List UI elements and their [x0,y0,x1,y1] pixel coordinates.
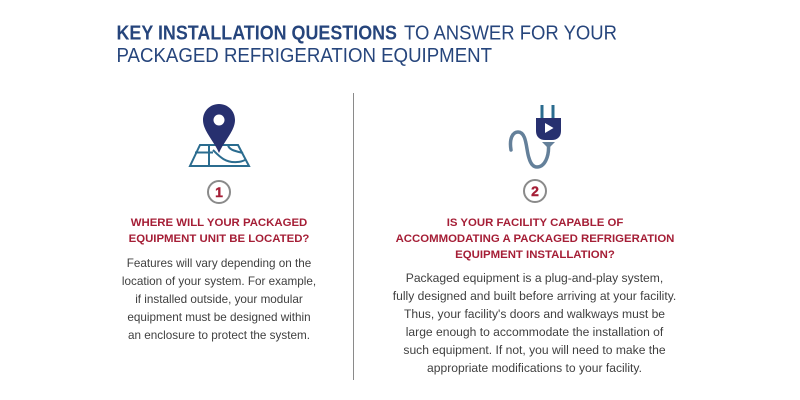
question 2 text: fully designed and built before arriving at your facility. [393,289,676,303]
question 1 text [122,257,316,342]
question 1 text: an enclosure to protect the system. [128,329,310,342]
question 1 heading: EQUIPMENT UNIT BE LOCATED? [129,233,309,245]
title: PACKAGED REFRIGERATION EQUIPMENT [116,45,492,67]
question 2 heading [396,217,674,261]
title [116,22,617,67]
question 1 text: equipment must be designed within [127,311,311,324]
question 2 text [392,271,676,375]
question 2 heading: EQUIPMENT INSTALLATION? [455,249,615,261]
number badge 1: 1 [215,184,223,200]
question 2 text: large enough to accommodate the installation of [406,325,663,339]
question 1 heading: WHERE WILL YOUR PACKAGED [131,217,307,229]
icon: map pin [188,104,251,167]
question 2 text: Packaged equipment is a plug-and-play system, [406,271,663,285]
question 1 text: Features will vary depending on the [127,257,311,270]
question 1 text: if installed outside, your modular [135,293,303,306]
question 2 text: Thus, your facility's doors and walkways must be [404,307,665,321]
number badge 1 [207,180,231,204]
question 2 text: such equipment. If not, you will need to make the [403,343,666,357]
question 2 text: appropriate modifications to your facility. [427,361,642,375]
question 1 heading [129,217,309,245]
question 2 heading: IS YOUR FACILITY CAPABLE OF [447,217,623,229]
number badge 2 [523,179,547,203]
icon: plug [508,105,561,169]
title: KEY INSTALLATION QUESTIONS [116,22,397,44]
center divider [353,93,354,380]
question 2 heading: ACCOMMODATING A PACKAGED REFRIGERATION [396,233,674,245]
number badge 2: 2 [531,183,539,199]
question 1 text: location of your system. For example, [122,275,316,288]
